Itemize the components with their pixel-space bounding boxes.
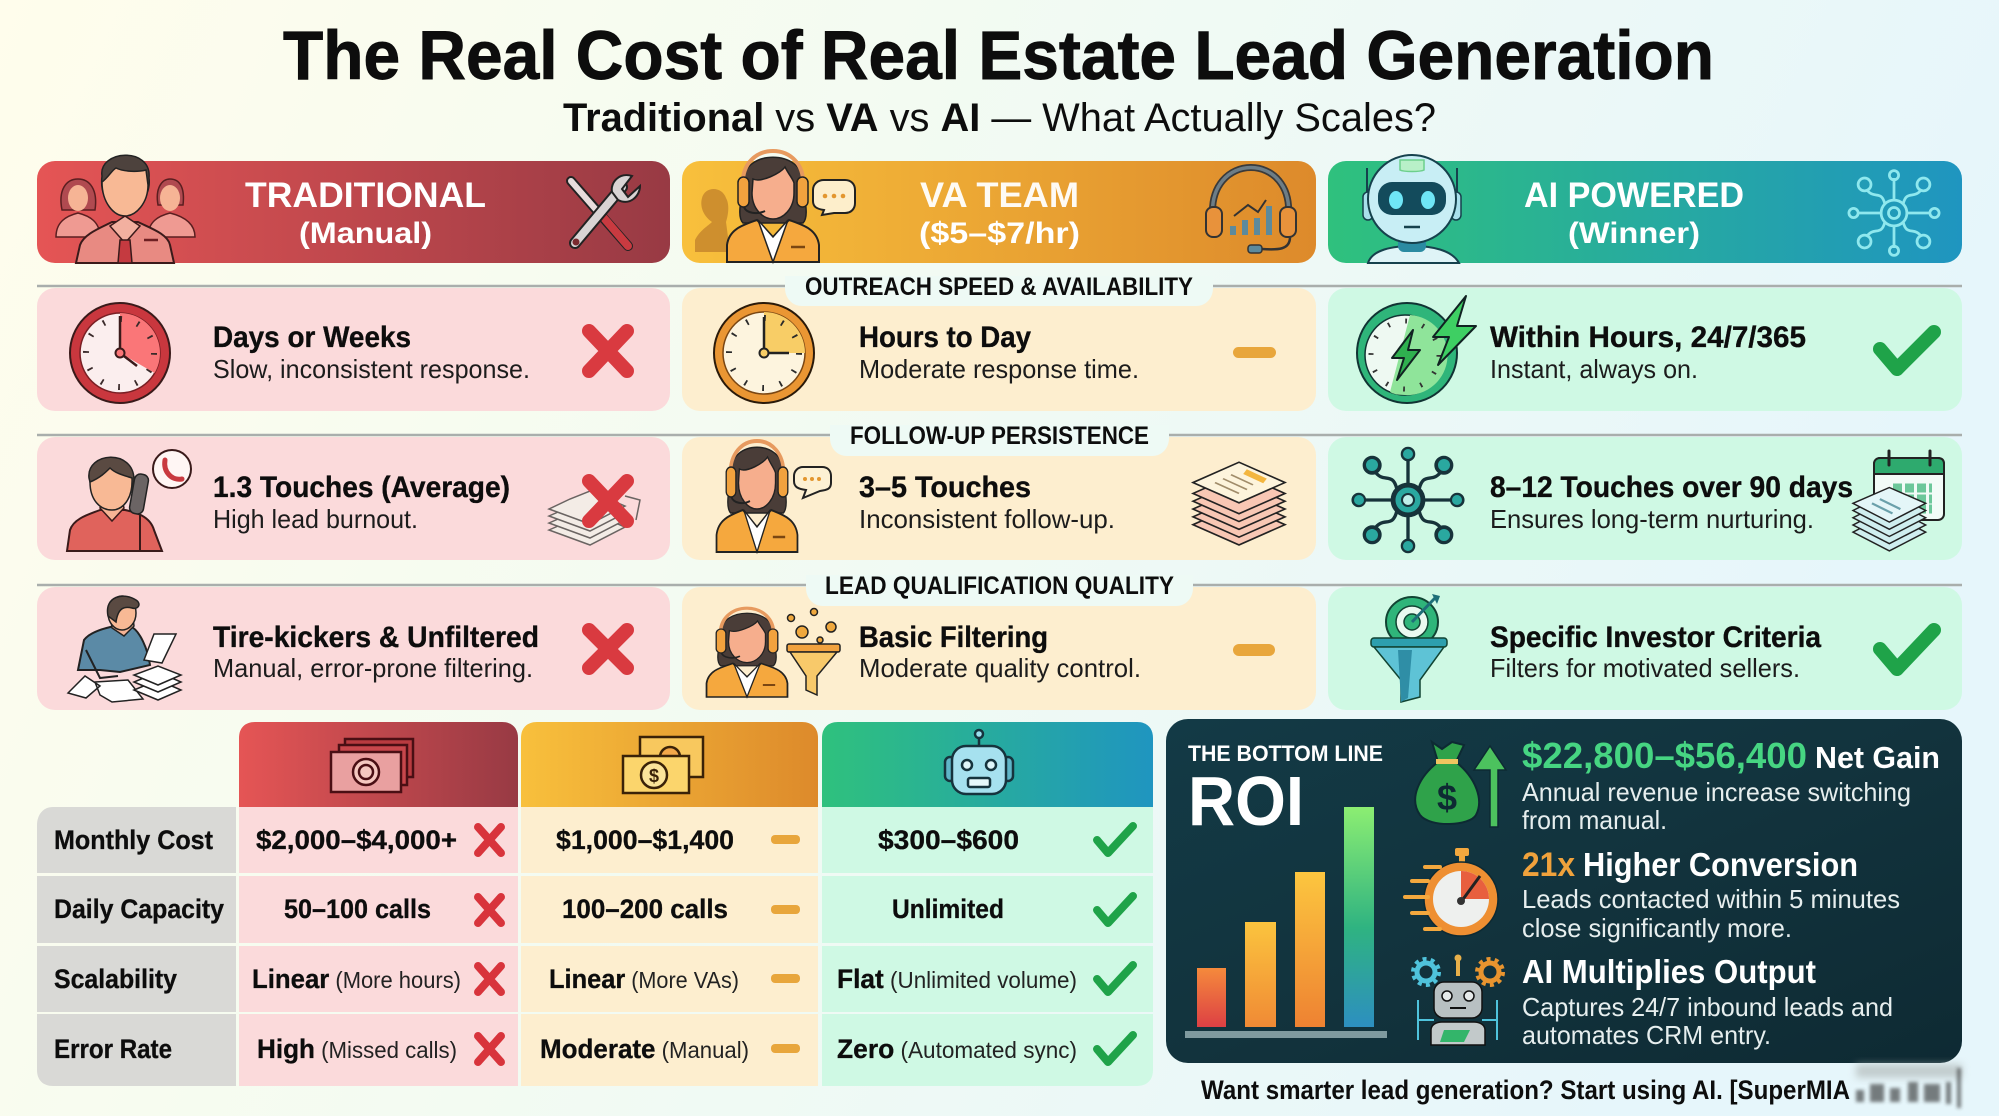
icon: stack of cash — [331, 739, 413, 792]
icon: orange dash — [1233, 644, 1275, 656]
icon: check — [1097, 1035, 1133, 1062]
icon: man on phone — [67, 450, 191, 551]
icon: orange dash — [1233, 347, 1276, 358]
label: outreach speed and availability: OUTREACH SPEED & AVAILABILITY — [805, 273, 1193, 301]
header: va team — [682, 151, 1316, 263]
table header: va — [521, 722, 818, 807]
icon: check — [1097, 965, 1133, 992]
icon: robot — [1363, 155, 1461, 263]
traditional value: 50–100 calls — [284, 894, 431, 924]
va value: Moderate (Manual) — [540, 1034, 749, 1064]
heading: 1.3 Touches (Average) — [213, 471, 510, 504]
card: traditional qualification — [37, 587, 670, 710]
row: error rate — [37, 1014, 1153, 1086]
heading: VA TEAM — [920, 176, 1079, 215]
stat description continued: automates CRM entry. — [1522, 1020, 1771, 1050]
card: va outreach — [682, 288, 1316, 411]
heading: TRADITIONAL — [245, 176, 486, 215]
header: traditional — [37, 155, 670, 263]
card: va qualification — [682, 587, 1316, 710]
description: Inconsistent follow-up. — [859, 504, 1115, 534]
icon: dash — [771, 905, 800, 914]
description: Filters for motivated sellers. — [1490, 653, 1800, 683]
subtitle: Traditional vs VA vs AI — What Actually Scales? — [563, 96, 1436, 140]
description: Manual, error-prone filtering. — [213, 653, 533, 683]
icon: network — [1353, 448, 1463, 552]
row label: Monthly Cost — [54, 825, 213, 855]
heading: Specific Investor Criteria — [1490, 621, 1821, 654]
row label: Error Rate — [54, 1034, 172, 1064]
row: monthly cost — [37, 807, 1153, 873]
icon: dash — [771, 974, 800, 983]
traditional value: $2,000–$4,000+ — [256, 825, 457, 855]
comparison table — [37, 722, 1153, 1086]
header: ai powered — [1328, 155, 1962, 263]
icon: money bag with arrow — [1415, 742, 1506, 827]
icon: agent — [717, 441, 797, 552]
icon: x — [478, 827, 501, 853]
icon: paper stack — [549, 491, 640, 545]
card: va follow-up — [682, 437, 1316, 560]
label: follow-up persistence: FOLLOW-UP PERSISTENCE — [850, 422, 1149, 450]
icon: green check — [1880, 630, 1934, 669]
title: The Real Cost of Real Estate Lead Generation — [283, 17, 1714, 94]
traditional value: Linear (More hours) — [252, 964, 461, 994]
icon: agent — [707, 608, 787, 697]
description: High lead burnout. — [213, 504, 418, 534]
icon: check — [1097, 826, 1133, 853]
row label: Scalability — [54, 964, 177, 994]
icon: paper stack — [1853, 488, 1926, 551]
icon: speech bubble — [794, 467, 831, 498]
icon: cash bills — [623, 737, 703, 793]
heading: 8–12 Touches over 90 days — [1490, 471, 1853, 504]
icon: orange clock — [714, 303, 814, 403]
panel heading: ROI — [1188, 762, 1304, 840]
ai value: $300–$600 — [878, 825, 1019, 855]
icon: cash bills: $ — [649, 766, 659, 786]
icon: dash — [771, 835, 800, 844]
icon: clock with lightning — [1357, 296, 1476, 403]
icon: red x — [589, 331, 627, 371]
icon: robot with gears — [1413, 954, 1503, 1045]
heading: Within Hours, 24/7/365 — [1490, 321, 1806, 354]
traditional value: High (Missed calls) — [257, 1034, 457, 1064]
stat label: AI Multiplies Output — [1522, 953, 1816, 990]
stat description: Leads contacted within 5 minutes — [1522, 884, 1900, 914]
panel: bottom line roi — [1166, 719, 1962, 1063]
label: lead qualification quality: LEAD QUALIFICATION QUALITY — [825, 572, 1174, 600]
icon: red x — [589, 481, 627, 521]
description: Ensures long-term nurturing. — [1490, 504, 1814, 534]
icon: red clock — [70, 303, 170, 403]
row: follow-up persistence — [37, 422, 1962, 560]
panel eyebrow: THE BOTTOM LINE — [1188, 741, 1383, 766]
row: daily capacity — [37, 876, 1153, 943]
va value: Linear (More VAs) — [549, 964, 739, 994]
icon: x — [478, 897, 501, 923]
row label: Daily Capacity — [54, 894, 224, 924]
card: traditional follow-up — [37, 437, 670, 560]
stat label: Higher Conversion — [1583, 846, 1858, 883]
stat label: Net Gain — [1815, 740, 1940, 775]
ai value: Flat (Unlimited volume) — [837, 964, 1077, 994]
va value: $1,000–$1,400 — [556, 825, 734, 855]
description: Moderate response time. — [859, 354, 1139, 384]
icon: red x — [589, 630, 627, 668]
card: traditional outreach — [37, 288, 670, 411]
icon: person sorting paperwork — [68, 596, 181, 702]
icon: target and funnel — [1371, 594, 1447, 702]
icon: check — [1097, 896, 1133, 923]
card: ai outreach — [1328, 288, 1962, 411]
card: ai follow-up — [1328, 437, 1962, 560]
icon: money bag with arrow: $ — [1437, 777, 1457, 818]
heading: Days or Weeks — [213, 321, 411, 354]
icon: stopwatch — [1405, 848, 1498, 936]
stat description: Annual revenue increase switching — [1522, 777, 1911, 807]
icon: team of three people — [56, 155, 195, 263]
subheading: ($5–$7/hr) — [919, 217, 1080, 250]
icon: dash — [771, 1044, 800, 1053]
stat value: $22,800–$56,400 — [1522, 735, 1807, 776]
heading: Tire-kickers & Unfiltered — [213, 621, 539, 654]
subheading: (Manual) — [299, 217, 432, 250]
heading: Hours to Day — [859, 321, 1031, 354]
description: Slow, inconsistent response. — [213, 354, 530, 384]
ai value: Unlimited — [892, 894, 1004, 924]
stat description: Captures 24/7 inbound leads and — [1522, 992, 1893, 1022]
stat: ai output — [1522, 953, 1893, 1050]
stat value: 21x — [1522, 846, 1575, 884]
icon: green check — [1880, 332, 1934, 369]
icon: x — [478, 966, 501, 992]
smudged corner watermark — [1856, 1064, 1962, 1108]
stat description continued: close significantly more. — [1522, 913, 1792, 943]
footer call to action: Want smarter lead generation? Start using AI. [SuperMIA — [1201, 1075, 1850, 1105]
icon: paper stack — [1193, 462, 1285, 545]
stat description continued: from manual. — [1522, 805, 1667, 835]
icon: neural network — [1849, 171, 1939, 255]
row: outreach speed — [37, 273, 1962, 411]
row: lead qualification — [37, 572, 1962, 710]
section dividers — [37, 286, 1962, 585]
icon: background colleague — [695, 189, 730, 252]
description: Instant, always on. — [1490, 354, 1698, 384]
description: Moderate quality control. — [859, 653, 1141, 683]
icon: x — [478, 1036, 501, 1062]
icon: headset with chart — [1206, 168, 1296, 253]
ai value: Zero (Automated sync) — [837, 1034, 1077, 1064]
icon: agent with headset — [727, 151, 819, 262]
icon: speech bubble — [813, 180, 855, 215]
va value: 100–200 calls — [562, 894, 728, 924]
icon: wrench and screwdriver — [571, 175, 640, 246]
card: ai qualification — [1328, 587, 1962, 710]
row: scalability — [37, 946, 1153, 1012]
icon: calendar — [1874, 451, 1944, 520]
stat: net gain — [1522, 735, 1940, 835]
icon: funnel with coins — [787, 608, 840, 695]
icon: robot head — [945, 730, 1013, 794]
bar chart: rising roi — [1185, 807, 1387, 1038]
table header: ai — [822, 722, 1153, 807]
heading: Basic Filtering — [859, 621, 1048, 654]
table header: traditional — [239, 722, 518, 807]
subheading: (Winner) — [1568, 217, 1700, 250]
heading: 3–5 Touches — [859, 471, 1031, 504]
heading: AI POWERED — [1524, 176, 1744, 215]
stat: conversion — [1522, 846, 1900, 943]
